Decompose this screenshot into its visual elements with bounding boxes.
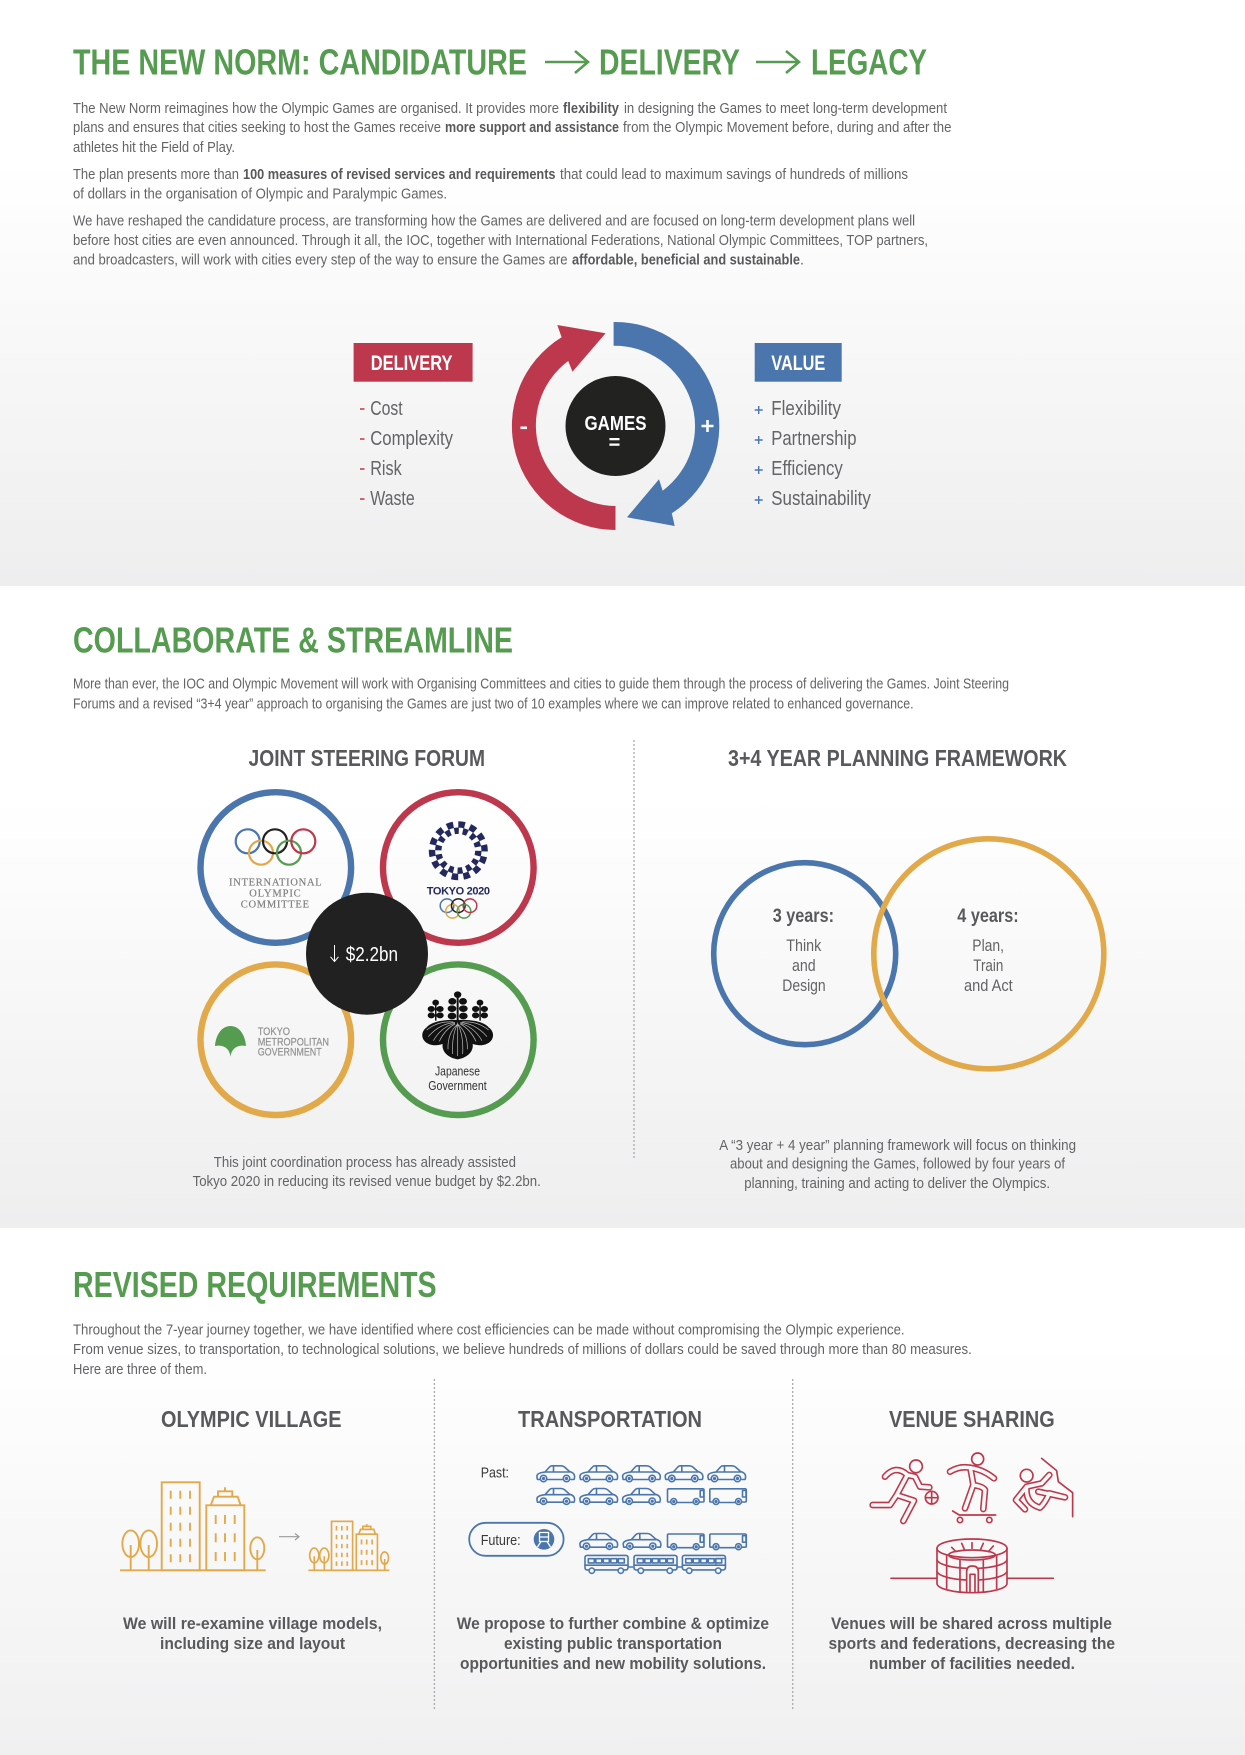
future label with train icon: Future: (481, 1532, 521, 1549)
IOC circle: INTERNATIONAL (229, 878, 322, 889)
caption: We will re-examine village models, (123, 1615, 382, 1633)
icon group: future vehicles (580, 1534, 746, 1573)
icon: small village (308, 1521, 389, 1570)
caption: We propose to further combine & optimize (457, 1615, 769, 1633)
caption: sports and federations, decreasing the (828, 1635, 1115, 1653)
intro text block: before host cities are even announced. Through it all, the IOC, together with International Federations, National Olympic Committees, TOP partners, (73, 233, 928, 249)
joint steering caption: Tokyo 2020 in reducing its revised venue budget by $2.2bn. (193, 1174, 541, 1190)
intro text block: affordable, beneficial and sustainable (572, 252, 800, 268)
title: DELIVERY (599, 42, 740, 82)
arrow: red delivery arc (512, 325, 616, 530)
icon: climber (1016, 1458, 1073, 1517)
Japanese Government circle: Government (428, 1078, 487, 1093)
Tokyo 2020 circle: TOKYO 2020 (427, 885, 490, 897)
collaborate text block: Forums and a revised “3+4 year” approach to organising the Games are just two of 10 examples where we can improve related to enhanced governance. (73, 696, 914, 712)
collaborate text block (73, 676, 1009, 712)
future label with train icon (469, 1523, 564, 1556)
delivery list: Complexity (370, 428, 453, 450)
intro text block: of dollars in the organisation of Olympic and Paralympic Games. (73, 186, 447, 202)
caption (828, 1615, 1115, 1673)
intro text block: plans and ensures that cities seeking to host the Games receive (73, 120, 441, 136)
Japanese Government circle (383, 964, 534, 1115)
3 years circle: Think (786, 937, 822, 955)
intro text block: from the Olympic Movement before, during and after the (623, 120, 952, 136)
intro text block: that could lead to maximum savings of hundreds of millions (560, 167, 908, 183)
arrow (279, 1534, 299, 1540)
intro text block: in designing the Games to meet long-term development (624, 101, 947, 117)
icon: stadium (891, 1539, 1053, 1593)
panel: new norm background (0, 0, 1245, 586)
joint steering forum diagram (200, 792, 534, 1115)
icon: basketball player (873, 1460, 938, 1521)
delivery list: Risk (370, 458, 403, 480)
Tokyo Metropolitan Government circle (200, 964, 351, 1115)
delivery list (360, 398, 453, 510)
past label: Past: (481, 1465, 509, 1482)
venn diagram: 3 years and 4 years (714, 839, 1104, 1069)
games circle (566, 376, 666, 476)
heading: TRANSPORTATION (518, 1406, 702, 1432)
caption: opportunities and new mobility solutions. (460, 1655, 766, 1673)
title: THE NEW NORM: CANDIDATURE (73, 42, 527, 82)
Tokyo Metropolitan Government circle: METROPOLITAN (258, 1037, 329, 1049)
value label: VALUE (771, 352, 825, 375)
title: LEGACY (811, 42, 927, 82)
IOC circle (200, 792, 351, 943)
cycle diagram: delivery minus value equals games (512, 322, 719, 530)
delivery label: DELIVERY (371, 352, 452, 375)
value list: Flexibility (771, 398, 841, 420)
4 years circle: 4 years: (957, 906, 1019, 927)
icon: skateboarder (950, 1453, 996, 1523)
Tokyo Metropolitan Government circle: GOVERNMENT (258, 1047, 322, 1059)
3 years circle: and (792, 957, 816, 975)
panel: olympic village (120, 1406, 389, 1653)
panel: transportation (457, 1406, 769, 1673)
arrow: blue value arc (614, 322, 719, 526)
collaborate text block: More than ever, the IOC and Olympic Movement will work with Organising Committees and cities to guide them through the process of delivering the Games. Joint Steering (73, 676, 1009, 692)
value list: Sustainability (771, 488, 871, 510)
requirements text block: Here are three of them. (73, 1362, 207, 1378)
games circle: = (609, 432, 620, 454)
4 years circle (874, 839, 1104, 1069)
planning framework caption: about and designing the Games, followed by four years of (730, 1157, 1066, 1173)
heading: OLYMPIC VILLAGE (161, 1406, 342, 1432)
4 years circle: Train (973, 957, 1003, 975)
4 years circle: Plan, (972, 937, 1004, 955)
value list (755, 398, 871, 510)
intro text block: athletes hit the Field of Play. (73, 140, 235, 156)
icon group: past vehicles (537, 1466, 746, 1504)
delivery label (354, 343, 473, 382)
intro text block: The plan presents more than (73, 167, 239, 183)
IOC circle: COMMITTEE (241, 900, 309, 911)
requirements text block (73, 1323, 972, 1378)
heading: planning framework: 3+4 YEAR PLANNING FRAMEWORK (728, 745, 1067, 771)
icon: paulownia emblem (422, 991, 493, 1059)
value list: Partnership (771, 428, 856, 450)
caption: existing public transportation (504, 1635, 722, 1653)
intro text block: . (800, 252, 804, 268)
panel: venue sharing (828, 1406, 1115, 1673)
panel: collaborate background (0, 586, 1245, 1228)
4 years circle: and Act (964, 977, 1013, 995)
savings circle: $2.2bn (346, 944, 398, 966)
Japanese Government circle: Japanese (435, 1064, 480, 1079)
joint steering caption: This joint coordination process has already assisted (214, 1155, 516, 1171)
Tokyo Metropolitan Government circle: TOKYO (258, 1026, 290, 1038)
value label (755, 343, 842, 382)
requirements text block: Throughout the 7-year journey together, we have identified where cost efficiencies can be made without compromising the Olympic experience. (73, 1323, 905, 1339)
planning framework caption: A “3 year + 4 year” planning framework will focus on thinking (719, 1138, 1076, 1154)
icon: large village (120, 1482, 266, 1570)
heading: collaborate and streamline: COLLABORATE & STREAMLINE (73, 619, 513, 660)
heading: revised requirements: REVISED REQUIREMENTS (73, 1264, 437, 1305)
intro text block: We have reshaped the candidature process, are transforming how the Games are delivered and are focused on long-term development plans well (73, 214, 915, 230)
3 years circle: Design (782, 977, 826, 995)
intro text block: The New Norm reimagines how the Olympic Games are organised. It provides more (73, 101, 559, 117)
caption (123, 1615, 382, 1653)
caption: including size and layout (160, 1635, 345, 1653)
delivery list: Cost (370, 398, 403, 420)
planning framework caption (719, 1138, 1076, 1192)
minus sign (520, 426, 527, 429)
requirements text block: From venue sizes, to transportation, to technological solutions, we believe hundreds of millions of dollars could be saved through more than 80 measures. (73, 1342, 972, 1358)
caption: number of facilities needed. (869, 1655, 1075, 1673)
planning framework caption: planning, training and acting to deliver the Olympics. (744, 1176, 1050, 1192)
icon: athletes (873, 1453, 1073, 1593)
Tokyo 2020 circle (383, 792, 534, 943)
heading: VENUE SHARING (889, 1406, 1055, 1432)
3 years circle (714, 863, 896, 1045)
caption: Venues will be shared across multiple (831, 1615, 1112, 1633)
delivery list: Waste (370, 488, 415, 510)
intro text block: more support and assistance (445, 120, 619, 136)
panel: revised requirements background (0, 1228, 1245, 1755)
games circle: GAMES (584, 413, 646, 435)
intro text block: and broadcasters, will work with cities every step of the way to ensure the Games are (73, 252, 568, 268)
title (73, 42, 927, 82)
joint steering caption (193, 1155, 541, 1190)
3 years circle: 3 years: (773, 906, 834, 927)
plus sign (702, 420, 714, 432)
intro text block: 100 measures of revised services and requirements (243, 167, 556, 183)
intro text block (73, 101, 952, 268)
caption (457, 1615, 769, 1673)
savings circle (306, 893, 428, 1015)
IOC circle: OLYMPIC (249, 889, 301, 900)
heading: joint steering forum: JOINT STEERING FORUM (248, 745, 485, 771)
value list: Efficiency (771, 458, 843, 480)
intro text block: flexibility (563, 101, 619, 117)
